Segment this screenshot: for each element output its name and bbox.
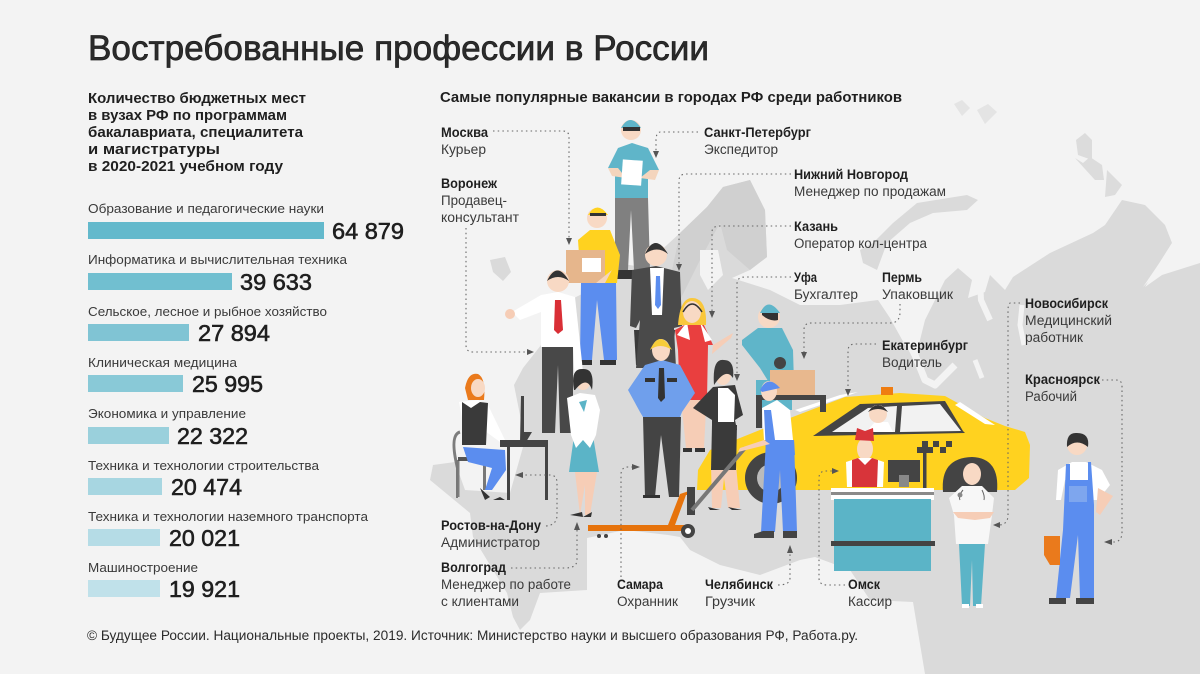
person: sales manager in suit — [630, 243, 682, 368]
connector: Chelyabinsk — [778, 545, 793, 585]
label: Saint Petersburg — [704, 125, 811, 157]
taxi car — [697, 387, 1030, 504]
label: Saint Petersburg: Санкт-Петербург — [704, 125, 811, 140]
label: Nizhny Novgorod: Менеджер по продажам — [794, 184, 946, 199]
label: Perm: Пермь — [882, 270, 922, 285]
person: doctor — [943, 457, 997, 608]
person: security guard — [628, 339, 695, 498]
left panel heading: в вузах РФ по программам — [88, 108, 287, 124]
person: forwarder with box — [566, 208, 620, 365]
left panel heading: и магистратуры — [88, 142, 220, 158]
person: loader — [738, 381, 797, 538]
label: Omsk: Омск — [848, 577, 880, 592]
connector: Moscow to courier — [493, 131, 572, 245]
label: Samara — [617, 577, 678, 609]
label: Rostov-on-Don: Администратор — [441, 535, 540, 550]
label: Voronezh: консультант — [441, 210, 519, 225]
connector: Novosibirsk — [993, 303, 1020, 528]
person: call centre operator — [675, 298, 733, 452]
person: administrator at desk — [454, 374, 548, 500]
label: Kazan: Оператор кол-центра — [794, 236, 927, 251]
connector: Rostov — [515, 472, 557, 526]
label: Krasnoyarsk: Красноярск — [1025, 372, 1100, 387]
label: Volgograd: Менеджер по работе — [441, 577, 571, 592]
label: Yekaterinburg — [882, 338, 968, 370]
bar: informatics — [88, 252, 348, 295]
bar: education: 64 879 — [332, 218, 404, 244]
label: Novosibirsk: Новосибирск — [1025, 296, 1108, 311]
label: Samara: Самара — [617, 577, 663, 592]
label: Volgograd — [441, 560, 571, 609]
label: Perm: Упаковщик — [882, 287, 953, 302]
connector: Ufa — [734, 277, 791, 381]
label: Nizhny Novgorod — [794, 167, 946, 199]
person: worker — [1044, 433, 1113, 604]
label: Omsk — [848, 577, 892, 609]
label: Rostov-on-Don: Ростов-на-Дону — [441, 518, 541, 533]
bar: economics — [88, 406, 248, 449]
label: Kazan: Казань — [794, 219, 838, 234]
label: Nizhny Novgorod: Нижний Новгород — [794, 167, 908, 182]
bar: informatics: Информатика и вычислительная техника — [88, 252, 348, 267]
pallet truck — [588, 448, 745, 538]
left panel heading: в 2020-2021 учебном году — [88, 159, 283, 175]
bar: education: Образование и педагогические науки — [88, 201, 324, 216]
label: Volgograd: с клиентами — [441, 594, 519, 609]
label: Krasnoyarsk: Рабочий — [1025, 389, 1077, 404]
bar: agriculture — [88, 304, 327, 346]
label: Saint Petersburg: Экспедитор — [704, 142, 778, 157]
bar: mechanical engineering — [88, 560, 240, 602]
label: Yekaterinburg: Екатеринбург — [882, 338, 968, 353]
connector: Perm — [801, 304, 900, 359]
bar: economics: Экономика и управление — [88, 406, 246, 421]
label: Samara: Охранник — [617, 594, 678, 609]
connector: Omsk — [819, 468, 845, 585]
label: Moscow: Курьер — [441, 142, 486, 157]
title: Востребованные профессии в России — [88, 29, 709, 68]
label: Novosibirsk — [1025, 296, 1112, 345]
label: Moscow — [441, 125, 488, 157]
bar: clinical medicine: Клиническая медицина — [88, 355, 238, 370]
connector: Voronezh to seller — [466, 228, 534, 355]
person: accountant — [693, 360, 743, 510]
bar: construction: 20 474 — [171, 474, 242, 500]
bar: ground transport — [88, 509, 369, 551]
bar chart: budget places — [88, 201, 404, 602]
label: Ufa: Уфа — [794, 270, 817, 285]
connector: Yekaterinburg — [845, 344, 876, 396]
bar: mechanical engineering: Машиностроение — [88, 560, 198, 575]
label: Voronezh: Продавец- — [441, 193, 507, 208]
connector: Saint Petersburg — [653, 132, 698, 158]
bar: agriculture: Сельское, лесное и рыбное хозяйство — [88, 304, 327, 319]
label: Voronezh — [441, 176, 519, 225]
person: shop assistant — [505, 270, 584, 433]
bar: construction — [88, 458, 320, 500]
label: Chelyabinsk: Челябинск — [705, 577, 773, 592]
bar: agriculture: 27 894 — [198, 320, 270, 346]
label: Novosibirsk: Медицинский — [1025, 313, 1112, 328]
bar: mechanical engineering: 19 921 — [169, 576, 240, 602]
person: cashier with counter — [831, 428, 935, 571]
map of Russia background — [430, 100, 1200, 674]
label: Volgograd: Волгоград — [441, 560, 506, 575]
label: Omsk: Кассир — [848, 594, 892, 609]
taxi checker sign — [917, 441, 952, 488]
label: Voronezh: Воронеж — [441, 176, 497, 191]
person: courier Saint Petersburg — [608, 120, 659, 279]
connector: Krasnoyarsk — [1102, 380, 1122, 545]
label: Krasnoyarsk — [1025, 372, 1100, 404]
connector: Nizhny Novgorod — [676, 174, 791, 271]
bar: economics: 22 322 — [177, 423, 248, 449]
label: Chelyabinsk: Грузчик — [705, 594, 755, 609]
connector: Volgograd — [511, 522, 580, 568]
label: Ufa: Бухгалтер — [794, 287, 858, 302]
label: Yekaterinburg: Водитель — [882, 355, 942, 370]
bar: informatics: 39 633 — [240, 269, 312, 295]
person: packer — [742, 304, 826, 428]
bar: construction: Техника и технологии строительства — [88, 458, 320, 473]
bar: education — [88, 201, 404, 244]
right panel heading: Самые популярные вакансии в городах РФ среди работников — [440, 90, 902, 106]
left panel heading: бакалавриата, специалитета — [88, 125, 304, 141]
label: Novosibirsk: работник — [1025, 330, 1083, 345]
bar: clinical medicine — [88, 355, 263, 397]
bar: ground transport: Техника и технологии наземного транспорта — [88, 509, 369, 524]
label: Ufa — [794, 270, 858, 302]
label: Perm — [882, 270, 953, 302]
label: Rostov-on-Don — [441, 518, 541, 550]
connector: Samara — [621, 464, 640, 577]
bar: ground transport: 20 021 — [169, 525, 240, 551]
label: Chelyabinsk — [705, 577, 773, 609]
bar: clinical medicine: 25 995 — [192, 371, 263, 397]
connector: Kazan — [709, 226, 791, 318]
source footer: © Будущее России. Национальные проекты, 2019. Источник: Министерство науки и высшего образования РФ, Работа.ру. — [87, 628, 858, 643]
person: client manager — [567, 369, 600, 517]
taxi driver — [866, 405, 893, 432]
left panel heading: Количество бюджетных мест — [88, 91, 306, 107]
label: Kazan — [794, 219, 927, 251]
left panel heading — [88, 91, 306, 175]
label: Moscow: Москва — [441, 125, 488, 140]
